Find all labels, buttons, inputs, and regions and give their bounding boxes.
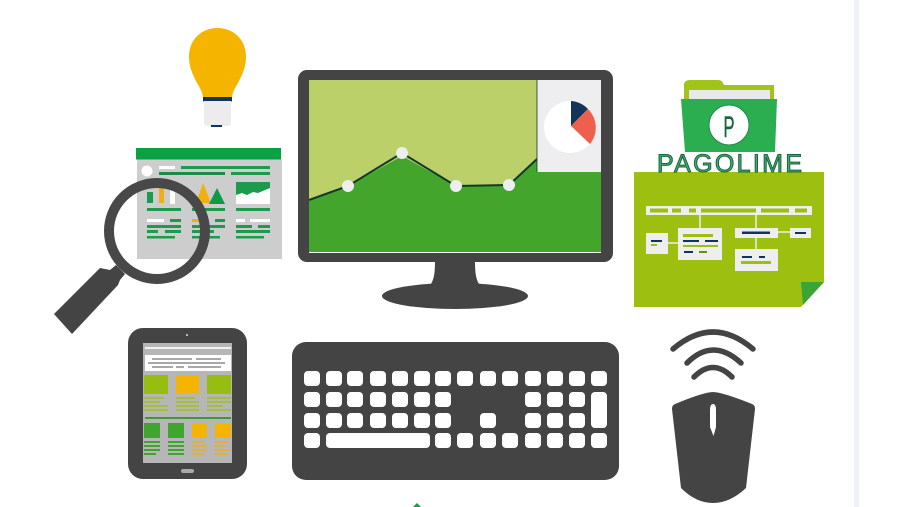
brand name: PAGOLIME: PAGOLIME bbox=[657, 150, 802, 178]
logo letter: P bbox=[724, 111, 734, 144]
tablet top cards bbox=[144, 375, 231, 411]
icon: magnifying glass bbox=[54, 183, 205, 334]
pie chart panel bbox=[537, 80, 601, 172]
tablet bottom cards bbox=[144, 423, 231, 455]
icon: folder with logo bbox=[681, 80, 777, 152]
triangle chart bbox=[196, 183, 225, 204]
panel: green sticky note with org chart bbox=[634, 172, 824, 307]
area chart bbox=[236, 182, 270, 204]
text lines bbox=[147, 208, 270, 238]
page fold bbox=[801, 282, 824, 305]
icon: tablet bbox=[128, 328, 247, 479]
bar chart bbox=[147, 187, 175, 204]
org chart bbox=[646, 206, 812, 271]
icon: green tip at bottom edge bbox=[413, 503, 421, 507]
panel: analytics dashboard bbox=[136, 148, 282, 259]
tablet header box bbox=[145, 355, 231, 371]
line chart on screen bbox=[309, 80, 601, 252]
icon: computer mouse bbox=[672, 392, 755, 503]
icon: keyboard bbox=[292, 342, 619, 480]
icon: desktop monitor bbox=[298, 70, 613, 309]
icon: wireless signal arcs bbox=[673, 332, 753, 377]
icon: light bulb bbox=[189, 28, 246, 127]
